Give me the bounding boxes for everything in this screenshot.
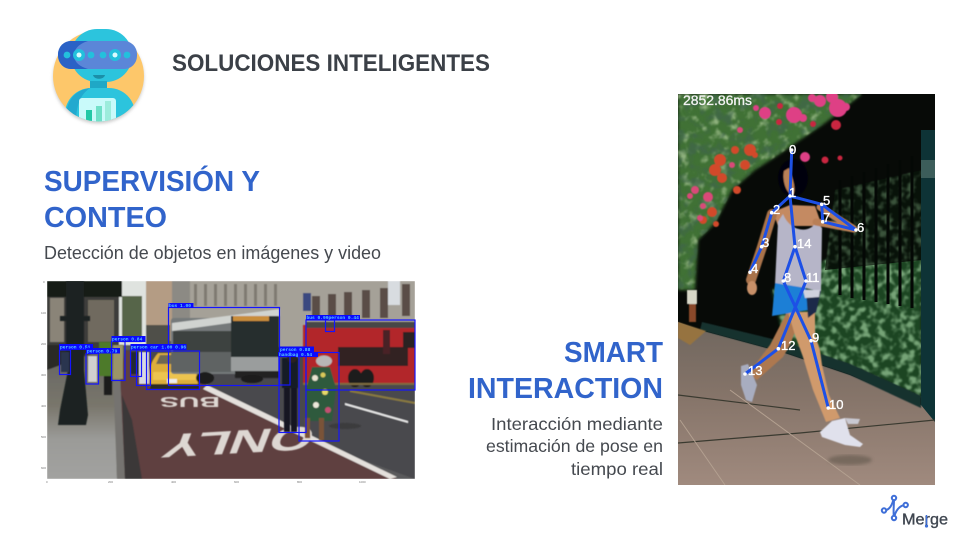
- axis ticks: 300: [41, 373, 46, 377]
- bus: [171, 309, 280, 384]
- keypoint labels: 5: [823, 193, 830, 208]
- runner body: [741, 159, 863, 447]
- axis ticks: 100: [41, 311, 46, 315]
- axis ticks: 400: [171, 480, 176, 484]
- logo: Merge: [882, 496, 948, 528]
- detection boxes: person 0.51: [60, 344, 91, 350]
- ground: [678, 322, 935, 485]
- keypoint labels: 12: [781, 338, 795, 353]
- heading: supervisión y conteo: SUPERVISIÓN Y: [44, 164, 260, 198]
- text: pose estimation description: estimación de pose en: [486, 436, 663, 456]
- keypoints: [743, 148, 858, 410]
- bus lane lettering: ONLY: [157, 419, 321, 465]
- text: detection description: Detección de objetos en imágenes y video: [44, 243, 381, 263]
- axis ticks: [41, 280, 366, 484]
- foliage: [678, 94, 862, 290]
- axis ticks: 200: [108, 480, 113, 484]
- flowers: [687, 91, 850, 227]
- skeleton: [745, 150, 856, 408]
- pedestrians on sidewalk: [61, 345, 149, 384]
- distant pedestrian: [687, 290, 697, 322]
- text: pose estimation description: tiempo real: [571, 459, 663, 479]
- axis ticks: 0: [46, 480, 48, 484]
- detection boxes: handbag 0.54: [279, 352, 312, 358]
- bus lane lettering: [160, 396, 313, 458]
- hydrant and planter: [99, 342, 112, 395]
- axis ticks: 800: [297, 480, 302, 484]
- heading: smart interaction: INTERACTION: [468, 373, 663, 405]
- detection boxes: [59, 303, 415, 441]
- keypoint labels: 2: [773, 202, 780, 217]
- heading: supervisión y conteo: [44, 164, 260, 234]
- keypoint labels: 8: [784, 270, 791, 285]
- axis ticks: 1000: [359, 480, 366, 484]
- axis ticks: 600: [234, 480, 239, 484]
- icon: robot avatar: [52, 29, 146, 125]
- detection boxes: person 0.88: [280, 347, 311, 353]
- detection boxes: person 0.84: [112, 336, 143, 342]
- keypoint labels: 9: [812, 330, 819, 345]
- axis ticks: 0: [43, 280, 45, 284]
- image: runner pose estimation: [678, 91, 935, 485]
- keypoint labels: 4: [751, 261, 758, 276]
- axis ticks: 400: [41, 404, 46, 408]
- axis ticks: 500: [41, 435, 46, 439]
- keypoint labels: [748, 142, 864, 412]
- keypoint labels: 6: [857, 220, 864, 235]
- double-decker: [303, 322, 415, 387]
- detection boxes: bus 0.99person 0.44: [306, 315, 359, 321]
- detection boxes: bus 1.00: [169, 303, 191, 309]
- axis ticks: 200: [41, 342, 46, 346]
- keypoint labels: 1: [789, 185, 796, 200]
- keypoint labels: 10: [829, 397, 843, 412]
- lamp post: [58, 281, 90, 425]
- text: pose estimation description: [486, 414, 663, 479]
- keypoint labels: 3: [762, 235, 769, 250]
- logo: Merge: Merge: [902, 512, 948, 528]
- title: SOLUCIONES INTELIGENTES: [172, 50, 490, 77]
- taxi: [149, 353, 199, 389]
- heading: smart interaction: [468, 337, 663, 405]
- detection boxes: person car 1.00 0.96: [131, 344, 186, 350]
- keypoint labels: 11: [806, 270, 820, 285]
- keypoint labels: 13: [748, 363, 762, 378]
- keypoint labels: 0: [789, 142, 796, 157]
- heading: supervisión y conteo: CONTEO: [44, 202, 167, 234]
- inference time label: 2852.86ms: [683, 93, 752, 108]
- image: street object detection: [41, 280, 415, 484]
- heading: smart interaction: SMART: [564, 337, 663, 369]
- axis ticks: 600: [41, 466, 46, 470]
- text: pose estimation description: Interacción mediante: [491, 414, 663, 434]
- detection boxes: person 0.79: [87, 348, 118, 354]
- keypoint labels: 7: [823, 210, 830, 225]
- fence and hedge: [772, 130, 935, 422]
- women: [282, 353, 361, 440]
- keypoint labels: 14: [797, 236, 811, 251]
- bus lane lettering: BUS: [160, 394, 220, 411]
